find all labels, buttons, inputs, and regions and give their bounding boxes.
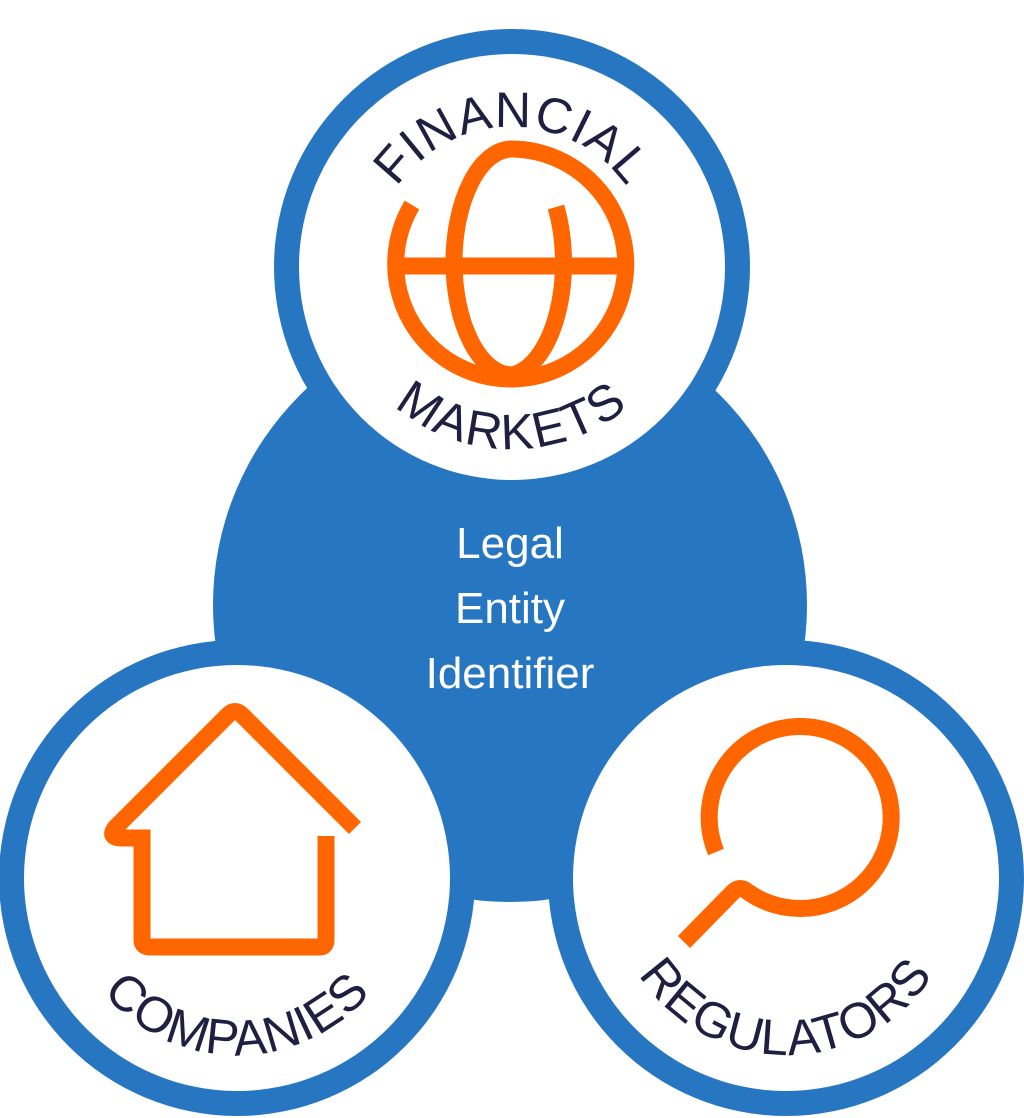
text: Legal Entity Identifier: Entity: [455, 584, 565, 633]
heading: MARKETS: MARKETS: [397, 380, 623, 450]
icon: house: [113, 712, 355, 947]
icon: magnifier: [684, 726, 891, 942]
text: Legal Entity Identifier: [426, 519, 594, 698]
heading: COMPANIES: COMPANIES: [110, 975, 366, 1056]
heading: REGULATORS: REGULATORS: [640, 956, 928, 1056]
central circle: [213, 308, 807, 902]
text: Legal Entity Identifier: Legal: [456, 519, 564, 568]
icon: globe: [396, 149, 626, 379]
panel: financial markets: [274, 29, 750, 480]
text: Legal Entity Identifier: Identifier: [426, 649, 594, 698]
panel: regulators: [549, 640, 1024, 1116]
heading: FINANCIAL: FINANCIAL: [373, 92, 641, 185]
panel: companies: [0, 641, 474, 1116]
